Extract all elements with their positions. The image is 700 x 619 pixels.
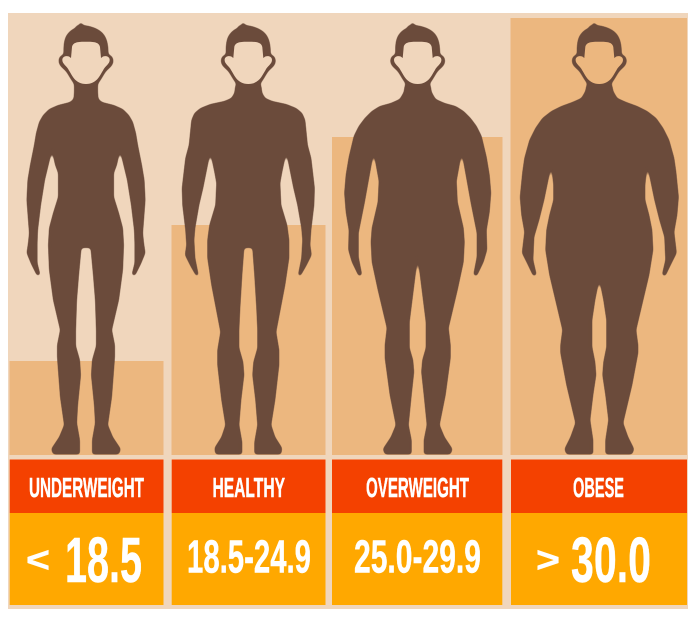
value box: underweight: 18.5 (65, 524, 142, 596)
figure: overweight body (344, 21, 491, 454)
bar: overweight level (332, 137, 502, 455)
label band: obese (511, 460, 687, 513)
value box: overweight (332, 513, 502, 605)
label band: underweight: UNDERWEIGHT (29, 472, 144, 503)
value box: overweight: 25.0-29.9 (354, 530, 481, 582)
figure: healthy body (182, 21, 315, 454)
value box: underweight: < (26, 539, 50, 580)
label band: overweight: OVERWEIGHT (366, 472, 469, 503)
bar: healthy level (172, 225, 326, 455)
value box: obese: > (536, 539, 560, 580)
value box: obese: 30.0 (571, 524, 651, 596)
value box: obese (511, 513, 687, 605)
label band: healthy (172, 460, 326, 513)
bar: obese level (510, 18, 687, 455)
value box: healthy (172, 513, 326, 605)
figure: underweight body (26, 21, 146, 454)
figure: obese body (520, 21, 679, 454)
label band: overweight (332, 460, 502, 513)
value box: healthy: 18.5-24.9 (187, 530, 311, 582)
label band: underweight (10, 460, 164, 513)
value box: underweight (10, 513, 164, 605)
label band: obese: OBESE (573, 472, 624, 503)
label band: healthy: HEALTHY (212, 472, 285, 503)
bar: underweight level (10, 361, 164, 455)
